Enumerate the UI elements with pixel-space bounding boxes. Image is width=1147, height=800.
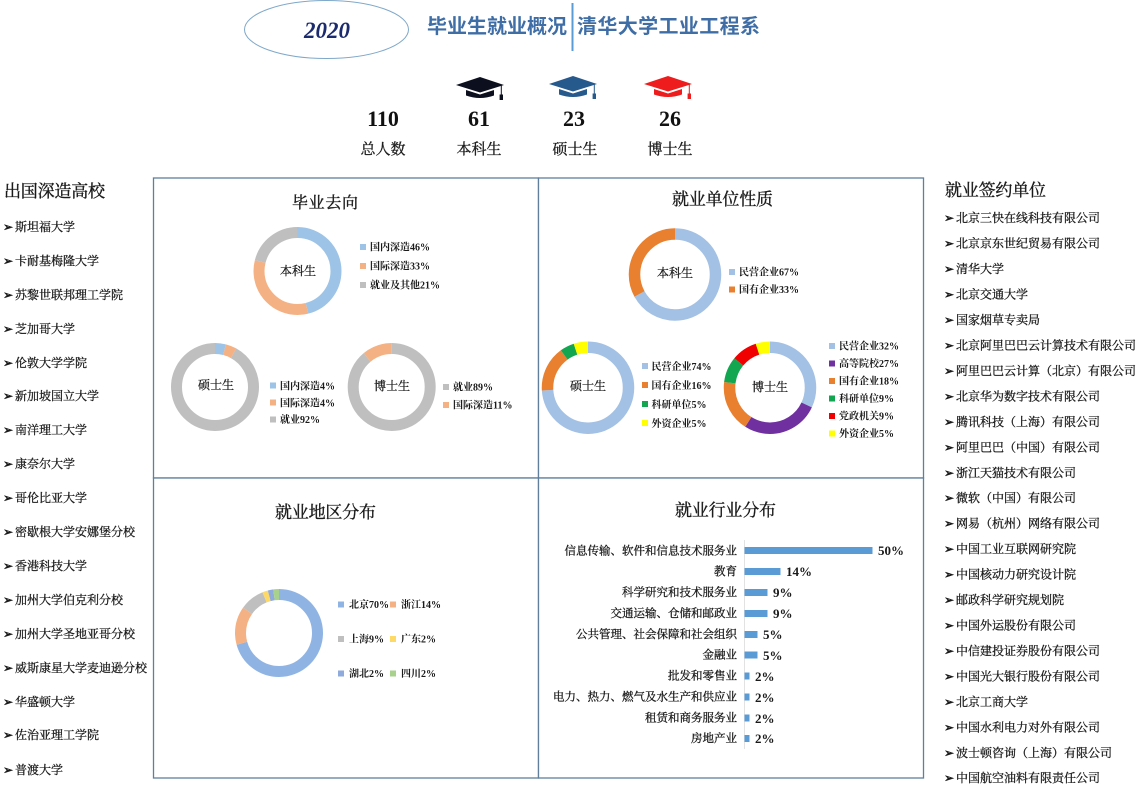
legend: master destination: 国内深造4% [280, 380, 335, 392]
left list: overseas universities: ➢ [3, 389, 13, 403]
left list: overseas universities: 佐治亚理工学院 [15, 728, 99, 742]
legend: region: 北京70% [349, 598, 389, 611]
panel: employment region [154, 478, 538, 778]
left list: overseas universities: 斯坦福大学 [15, 219, 75, 234]
bar chart: industry: 金融业 [702, 648, 737, 662]
left list: overseas universities: 普渡大学 [15, 762, 63, 777]
donut: undergraduate employer: 本科生 [657, 265, 693, 280]
bar chart: industry: 2% [755, 731, 774, 746]
right list: signed employers: 中国光大银行股份有限公司 [956, 668, 1100, 684]
legend: undergraduate employer: 民营企业67% [739, 266, 799, 278]
bar chart: industry: 5% [763, 648, 782, 663]
stat: total [360, 106, 406, 158]
bar chart: industry: 批发和零售业 [668, 668, 737, 682]
bar chart: industry: 科学研究和技术服务业 [622, 585, 737, 599]
right list: signed employers: ➢ [944, 618, 954, 632]
right list: signed employers: 北京华为数字技术有限公司 [956, 388, 1100, 404]
icon: black graduation cap [456, 77, 504, 100]
legend: region: 浙江14% [401, 598, 441, 611]
stat: undergraduate [456, 77, 504, 158]
heading: signed employers: 就业签约单位 [945, 181, 1046, 200]
donut: master employer: 硕士生 [570, 378, 606, 393]
legend: region: 广东2% [401, 632, 436, 646]
right list: signed employers: 清华大学 [956, 261, 1004, 276]
right list: signed employers: 北京交通大学 [956, 286, 1028, 302]
right list: signed employers: ➢ [944, 542, 954, 556]
legend: doctor employer: 外资企业5% [839, 427, 894, 440]
right list: signed employers: 浙江天猫技术有限公司 [956, 465, 1076, 480]
left list: overseas universities: 苏黎世联邦理工学院 [15, 287, 123, 302]
donut: undergraduate destination [259, 232, 336, 310]
legend: master destination: 国际深造4% [280, 396, 335, 410]
stat: total: 总人数 [360, 141, 406, 158]
bar chart: industry [553, 540, 904, 749]
right list: signed employers: 阿里巴巴（中国）有限公司 [956, 440, 1100, 454]
right list: signed employers: 北京工商大学 [956, 694, 1028, 709]
right list: signed employers: 北京三快在线科技有限公司 [956, 210, 1100, 225]
bar chart: industry: 14% [786, 564, 812, 579]
right list: signed employers: 中国航空油料有限责任公司 [956, 770, 1100, 785]
right list: signed employers: ➢ [944, 364, 954, 378]
right list: signed employers: ➢ [944, 644, 954, 658]
left list: overseas universities: 哥伦比亚大学 [15, 490, 87, 505]
right list: signed employers [944, 181, 1136, 785]
left list: overseas universities: 新加坡国立大学 [15, 388, 99, 403]
legend: master employer: 外资企业5% [652, 417, 706, 430]
right list: signed employers: ➢ [944, 236, 954, 250]
legend: doctor employer: 党政机关9% [839, 410, 894, 422]
right list: signed employers: ➢ [944, 338, 954, 352]
left list: overseas universities: ➢ [3, 322, 13, 336]
legend: doctor employer: 国有企业18% [839, 374, 899, 388]
left list: overseas universities: 加州大学伯克利分校 [15, 592, 124, 607]
right list: signed employers: 阿里巴巴云计算（北京）有限公司 [956, 363, 1136, 378]
legend: master employer: 国有企业16% [652, 379, 712, 392]
left list: overseas universities: 威斯康星大学麦迪逊分校 [15, 660, 148, 675]
heading: overseas universities: 出国深造高校 [4, 182, 106, 201]
right list: signed employers: ➢ [944, 313, 954, 327]
donut: master destination [176, 348, 254, 426]
right list: signed employers: 中国外运股份有限公司 [956, 618, 1076, 632]
left list: overseas universities: ➢ [3, 491, 13, 505]
right list: signed employers: 腾讯科技（上海）有限公司 [956, 414, 1100, 429]
left list: overseas universities: 华盛顿大学 [15, 694, 75, 709]
donut: undergraduate destination: 本科生 [280, 263, 316, 278]
right list: signed employers: ➢ [944, 491, 954, 505]
icon: red graduation cap [644, 76, 692, 99]
left list: overseas universities: 芝加哥大学 [15, 321, 75, 336]
legend: undergraduate employer: 国有企业33% [739, 283, 799, 296]
heading: graduation destination: 毕业去向 [292, 194, 358, 212]
right list: signed employers: 中国核动力研究设计院 [956, 566, 1076, 582]
bar chart: industry: 电力、热力、燃气及水生产和供应业 [553, 690, 737, 704]
legend: master destination [270, 380, 335, 426]
bar chart: industry: 交通运输、仓储和邮政业 [610, 606, 737, 620]
title: 毕业生就业概况 [427, 15, 567, 38]
right list: signed employers: 邮政科学研究规划院 [956, 592, 1064, 607]
right list: signed employers: ➢ [944, 720, 954, 734]
legend: region: 湖北2% [349, 667, 384, 680]
left list: overseas universities: ➢ [3, 220, 13, 234]
title: 清华大学工业工程系 [577, 15, 760, 38]
stat: doctor: 26 [659, 106, 681, 131]
right list: signed employers: ➢ [944, 695, 954, 709]
bar chart: industry: 2% [755, 711, 774, 726]
right list: signed employers: 网易（杭州）网络有限公司 [956, 516, 1100, 530]
legend: doctor destination: 就业89% [453, 380, 493, 394]
left list: overseas universities: ➢ [3, 423, 13, 437]
stat: total: 110 [367, 106, 399, 131]
legend: region: 上海9% [349, 632, 384, 646]
left list: overseas universities: 卡耐基梅隆大学 [15, 253, 99, 268]
right list: signed employers: 中国水利电力对外有限公司 [956, 720, 1100, 734]
panel: graduation destination [154, 178, 538, 478]
year ellipse badge: 2020 [303, 18, 350, 43]
right list: signed employers: ➢ [944, 516, 954, 530]
bar chart: industry: 租赁和商务服务业 [645, 710, 737, 724]
stat: master [549, 76, 598, 158]
left list: overseas universities: ➢ [3, 728, 13, 742]
legend: undergraduate employer [729, 266, 799, 296]
bar chart: industry: 教育 [714, 564, 737, 578]
right list: signed employers: ➢ [944, 415, 954, 429]
right list: signed employers: 中国工业互联网研究院 [956, 541, 1076, 556]
left list: overseas universities: 康奈尔大学 [15, 456, 75, 471]
right list: signed employers: ➢ [944, 771, 954, 785]
right list: signed employers: 波士顿咨询（上海）有限公司 [956, 745, 1112, 760]
left list: overseas universities: ➢ [3, 254, 13, 268]
left list: overseas universities: ➢ [3, 593, 13, 607]
left list: overseas universities: 密歇根大学安娜堡分校 [15, 524, 136, 539]
right list: signed employers: ➢ [944, 211, 954, 225]
right list: signed employers: 中信建投证券股份有限公司 [956, 643, 1100, 658]
legend: undergraduate destination: 国际深造33% [370, 260, 430, 272]
heading: employer type: 就业单位性质 [672, 190, 773, 209]
right list: signed employers: ➢ [944, 670, 954, 684]
heading: employment region: 就业地区分布 [275, 503, 376, 522]
right list: signed employers: ➢ [944, 440, 954, 454]
left list: overseas universities: ➢ [3, 763, 13, 777]
donut: master destination: 硕士生 [198, 377, 234, 392]
legend: master destination: 就业92% [280, 413, 320, 426]
left list: overseas universities: ➢ [3, 661, 13, 675]
stat: master: 硕士生 [552, 141, 598, 158]
legend: doctor employer: 民营企业32% [839, 340, 899, 352]
bar chart: industry: 公共管理、社会保障和社会组织 [576, 627, 737, 641]
icon: blue graduation cap [549, 76, 597, 99]
stat: undergraduate: 61 [468, 106, 490, 131]
heading: employment industry: 就业行业分布 [675, 501, 776, 520]
right list: signed employers: 微软（中国）有限公司 [956, 490, 1076, 505]
right list: signed employers: 北京阿里巴巴云计算技术有限公司 [956, 338, 1136, 352]
left list: overseas universities: 伦敦大学学院 [15, 355, 87, 370]
right list: signed employers: 北京京东世纪贸易有限公司 [956, 236, 1100, 250]
panel: employer type [538, 178, 924, 478]
left list: overseas universities: 南洋理工大学 [15, 422, 87, 437]
legend: doctor employer: 高等院校27% [839, 357, 899, 370]
legend: doctor destination [443, 380, 512, 412]
stat: doctor: 博士生 [647, 140, 693, 158]
legend: undergraduate destination [360, 240, 440, 292]
right list: signed employers: ➢ [944, 288, 954, 302]
left list: overseas universities: ➢ [3, 356, 13, 370]
bar chart: industry: 2% [755, 669, 774, 684]
donut: doctor destination: 博士生 [374, 378, 410, 393]
right list: signed employers: ➢ [944, 390, 954, 404]
legend: doctor destination: 国际深造11% [453, 398, 512, 412]
donut: doctor destination [353, 348, 430, 426]
donut: doctor employer [730, 347, 810, 428]
right list: signed employers: ➢ [944, 568, 954, 582]
left list: overseas universities: 加州大学圣地亚哥分校 [15, 626, 136, 641]
right list: signed employers: 国家烟草专卖局 [956, 312, 1040, 327]
bar chart: industry: 5% [763, 627, 782, 642]
bar chart: industry: 信息传输、软件和信息技术服务业 [564, 544, 737, 558]
legend: region: 四川2% [401, 668, 436, 680]
legend: doctor employer [829, 340, 899, 440]
legend: undergraduate destination: 就业及其他21% [370, 278, 440, 292]
left list: overseas universities: ➢ [3, 559, 13, 573]
bar chart: industry: 9% [773, 606, 792, 621]
stat: undergraduate: 本科生 [456, 141, 502, 158]
title [427, 3, 760, 51]
donut: master employer [548, 347, 628, 428]
left list: overseas universities: ➢ [3, 695, 13, 709]
donut: undergraduate employer [634, 234, 716, 315]
left list: overseas universities: ➢ [3, 457, 13, 471]
left list: overseas universities: ➢ [3, 525, 13, 539]
stat: doctor [644, 76, 693, 158]
right list: signed employers: ➢ [944, 593, 954, 607]
bar chart: industry: 2% [755, 690, 774, 705]
bar chart: industry: 房地产业 [691, 731, 737, 745]
left list: overseas universities: 香港科技大学 [15, 558, 87, 573]
left list: overseas universities: ➢ [3, 288, 13, 302]
right list: signed employers: ➢ [944, 746, 954, 760]
donut: region [240, 594, 318, 672]
legend: region [338, 598, 441, 680]
legend: doctor employer: 科研单位9% [839, 392, 894, 405]
bar chart: industry: 50% [878, 543, 904, 558]
legend: master employer: 民营企业74% [652, 360, 712, 373]
left list: overseas universities [3, 182, 148, 777]
panel: employment industry [538, 478, 924, 778]
year ellipse badge [244, 0, 408, 58]
stat: master: 23 [563, 106, 585, 131]
right list: signed employers: ➢ [944, 262, 954, 276]
legend: master employer: 科研单位5% [652, 398, 706, 411]
right list: signed employers: ➢ [944, 466, 954, 480]
donut: doctor employer: 博士生 [752, 379, 788, 394]
legend: undergraduate destination: 国内深造46% [370, 240, 430, 254]
left list: overseas universities: ➢ [3, 627, 13, 641]
legend: master employer [642, 360, 712, 430]
bar chart: industry: 9% [773, 585, 792, 600]
